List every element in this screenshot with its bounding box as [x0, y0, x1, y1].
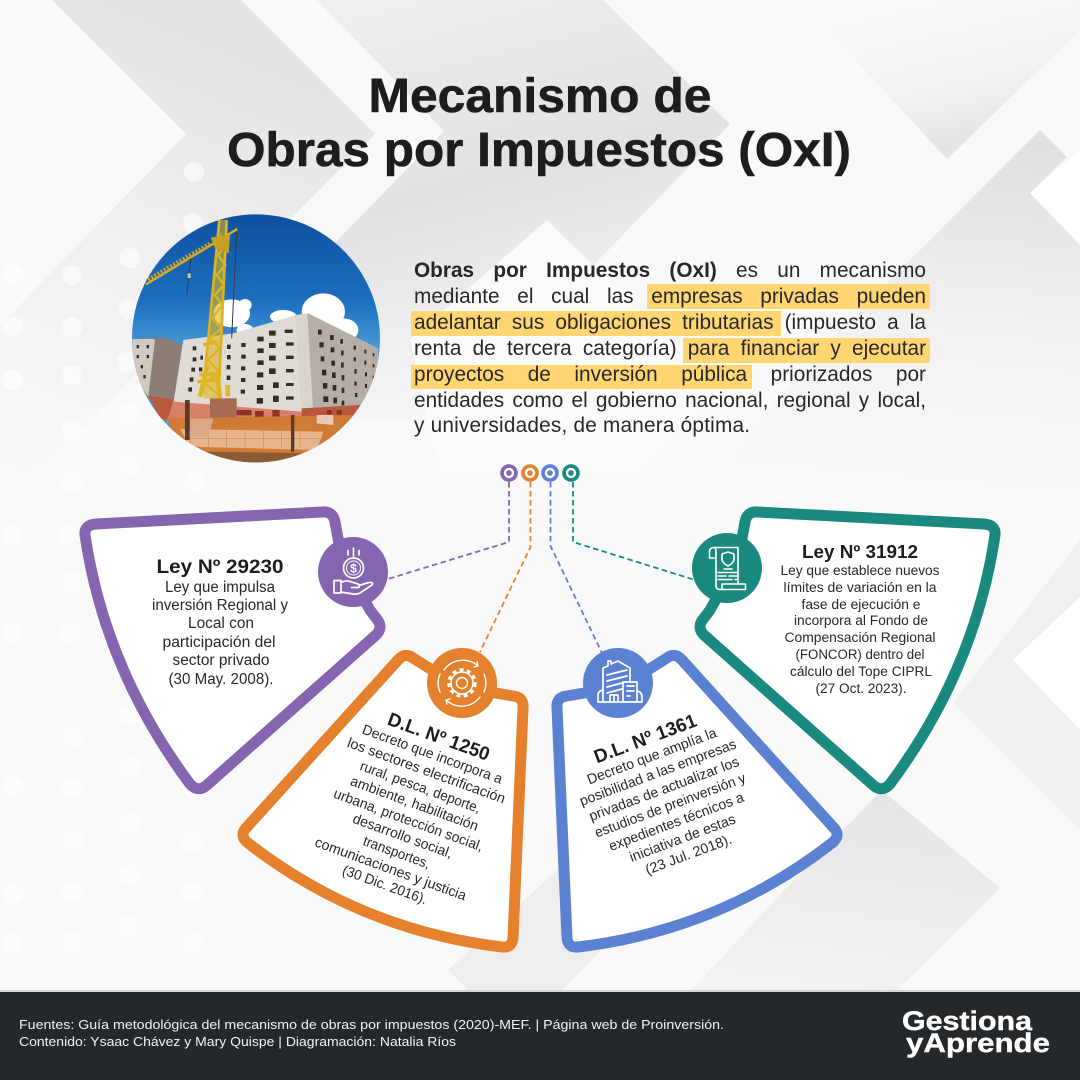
text: D.L. 1250: comunicaciones y justicia: [313, 835, 468, 904]
text: Ley 29230: inversión Regional y: [152, 597, 288, 614]
text: D.L. 1250: rural, pesca, deporte,: [358, 758, 483, 817]
text: Ley 31912: incorpora al Fondo de: [794, 613, 928, 629]
footer credits: Fuentes: Guía metodológica del mecanismo de obras por impuestos (2020)-MEF. | Página web de Proinversión.: [19, 1017, 724, 1032]
timeline dots: [502, 466, 578, 480]
icon: money in hand: $: [350, 562, 357, 576]
text: D.L. 1361: posibilidad a las empresas: [578, 737, 739, 810]
text: Ley 31912: Ley que establece nuevos: [780, 563, 940, 579]
text: Ley 31912: fase de ejecución e: [802, 597, 921, 613]
photo: building under construction with crane: [130, 212, 383, 465]
text: Ley 29230: Ley Nº 29230: [156, 556, 284, 578]
text: Ley 29230: Ley que impulsa: [165, 579, 275, 596]
connector dots and dashed lines: [388, 482, 695, 653]
intro paragraph: y universidades, de manera óptima.: [414, 414, 750, 437]
logo: Gestiona y Aprende: yAprende: [906, 1028, 1050, 1058]
logo: Gestiona y Aprende: Gestiona: [902, 1006, 1033, 1036]
panel: D.L. 1250: [243, 648, 523, 947]
panel: Ley 31912: [692, 512, 995, 789]
logo: Gestiona y Aprende: [902, 1006, 1050, 1058]
panel: D.L. 1361: [557, 648, 837, 947]
text: D.L. 1250: ambiente, habilitación: [348, 774, 480, 835]
text: D.L. 1361: (23 Jul. 2018).: [643, 832, 734, 879]
text: D.L. 1361: D.L. Nº 1361: [591, 711, 700, 768]
text: D.L. 1250: D.L. Nº 1250: [385, 709, 492, 766]
icon: money in hand: [318, 537, 388, 607]
text: Ley 29230: sector privado: [172, 652, 270, 669]
icon: office buildings: [583, 648, 653, 718]
title: Obras por Impuestos (OxI): [227, 124, 851, 177]
text: D.L. 1250: los sectores electrificación: [345, 735, 507, 807]
icon: gear with arrows: [427, 648, 497, 718]
text: D.L. 1361: [564, 701, 769, 892]
text: Ley 29230: [152, 556, 288, 688]
panel: Ley 29230: [85, 512, 388, 789]
text: D.L. 1361: privadas de actualizar los: [587, 754, 742, 825]
text: D.L. 1250: transportes,: [361, 834, 432, 872]
intro paragraph: [411, 259, 930, 437]
text: Ley 29230: (30 May. 2008).: [168, 671, 274, 688]
intro paragraph: Obras por Impuestos (OxI) es un mecanismo: [414, 259, 926, 282]
text: Ley 29230: participación del: [162, 634, 276, 651]
text: Ley 31912: límites de variación en la: [784, 580, 937, 596]
text: D.L. 1250: Decreto que incorpora a: [360, 722, 505, 788]
intro paragraph: renta de tercera categoría) para financiar y ejecutar: [414, 337, 926, 360]
intro paragraph: proyectos de inversión pública priorizados por: [414, 363, 926, 386]
text: D.L. 1361: Decreto que amplía la: [585, 725, 719, 788]
text: D.L. 1250: [303, 699, 521, 921]
text: D.L. 1361: estudios de preinversión y: [593, 770, 749, 841]
text: D.L. 1361: expedientes técnicos a: [607, 790, 746, 855]
text: Ley 31912: Ley Nº 31912: [802, 541, 918, 562]
footer bar: [0, 990, 1080, 1080]
text: Ley 31912: (FONCOR) dentro del: [796, 647, 924, 663]
text: D.L. 1250: urbana, protección social,: [331, 786, 485, 855]
text: Ley 29230: Local con: [188, 615, 254, 632]
text: Ley 31912: (27 Oct. 2023).: [816, 681, 906, 697]
text: D.L. 1250: (30 Dic. 2016).: [340, 863, 429, 908]
text: Ley 31912: Compensación Regional: [784, 630, 936, 646]
title: [227, 70, 851, 177]
text: D.L. 1250: desarrollo social,: [350, 811, 454, 862]
footer credits: Contenido: Ysaac Chávez y Mary Quispe | Diagramación: Natalia Ríos: [19, 1034, 457, 1049]
footer credits: [19, 1017, 724, 1049]
icon: legal document scroll: [692, 533, 762, 603]
text: Ley 31912: cálculo del Tope CIPRL: [790, 664, 932, 680]
intro paragraph: adelantar sus obligaciones tributarias (impuesto a la: [414, 311, 926, 334]
text: D.L. 1361: iniciativa de estas: [627, 812, 738, 866]
intro paragraph: mediante el cual las empresas privadas pueden: [414, 285, 926, 308]
intro paragraph: entidades como el gobierno nacional, regional y local,: [414, 389, 926, 412]
text: Ley 31912: [780, 541, 940, 697]
title: Mecanismo de: [368, 70, 712, 123]
